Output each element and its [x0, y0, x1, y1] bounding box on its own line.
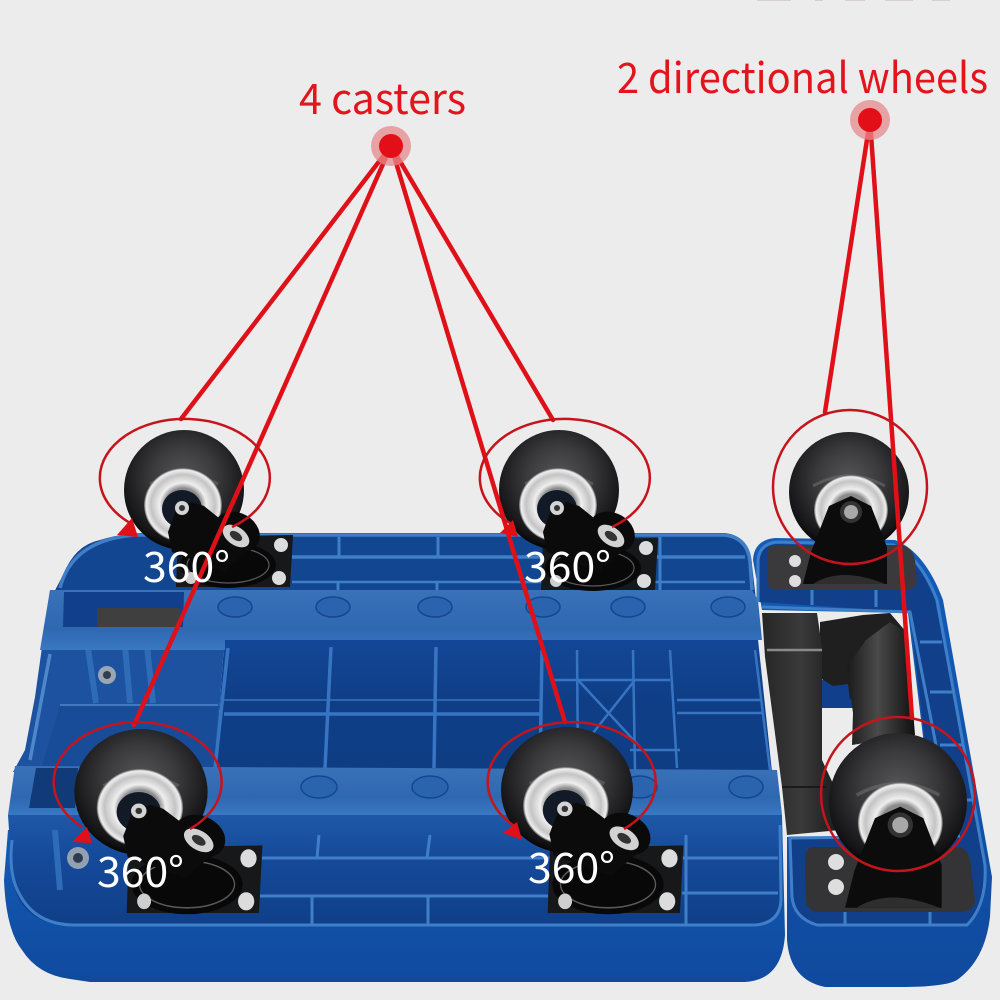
caster: top right: [499, 430, 658, 591]
directional wheel: top: [768, 432, 917, 590]
right cart board: [753, 538, 992, 987]
caster: top left: [124, 430, 293, 588]
label: 360 degrees bottom left: 360°: [97, 839, 184, 900]
right board: tray floor: [758, 544, 985, 925]
rotation ring: top right caster: [480, 419, 650, 537]
caster: bottom left: [74, 729, 262, 914]
caster: bottom right: [501, 727, 683, 914]
folding handle: [762, 613, 915, 835]
rotation ring: bottom right caster: [488, 722, 656, 840]
highlight ring: bottom directional wheel: [821, 717, 975, 871]
left sloped wall: [13, 590, 225, 772]
label: 360 degrees top right: 360°: [524, 534, 611, 595]
directional wheel: bottom: [805, 733, 975, 912]
wall lower floor: [40, 705, 218, 772]
far left pocket: [63, 592, 184, 627]
center grid well: [215, 630, 772, 772]
near tray ribs: [11, 825, 781, 925]
main cart board: [4, 533, 785, 982]
near shelf recesses: [301, 776, 763, 798]
blue seen through handle gap: [822, 680, 853, 708]
clipped caption fragment at top edge: [757, 0, 950, 1]
label: 360 degrees bottom right: 360°: [528, 835, 615, 896]
wall ribs and nut: [30, 646, 218, 760]
lower nut: [67, 847, 89, 869]
far tray ribs: [60, 535, 752, 590]
right board: body: [753, 538, 992, 987]
grid lines: [215, 647, 770, 770]
board: far tray: [50, 533, 756, 600]
far shelf with round recesses: [40, 590, 762, 650]
label: 360 degrees top left: 360°: [143, 534, 230, 595]
pointer lines from directional wheels dot: [825, 120, 912, 718]
right board: ribs: [758, 542, 985, 925]
board: front lip: [4, 815, 785, 982]
label: 4 casters: 4 casters: [299, 66, 466, 127]
near tray: [8, 815, 782, 925]
far shelf recesses: [218, 597, 745, 617]
highlight ring: top directional wheel: [773, 410, 927, 564]
near left pocket: [29, 768, 78, 808]
marker dot: directional wheels: [850, 100, 890, 140]
label: 2 directional wheels: 2 directional wheels: [617, 45, 988, 106]
rotation ring: top left caster: [100, 419, 270, 537]
marker dot: 4 casters: [371, 126, 411, 166]
rotation ring: bottom left caster: [54, 722, 222, 843]
near shelf: [8, 766, 782, 815]
pointer lines from 4 casters dot: [134, 146, 565, 725]
